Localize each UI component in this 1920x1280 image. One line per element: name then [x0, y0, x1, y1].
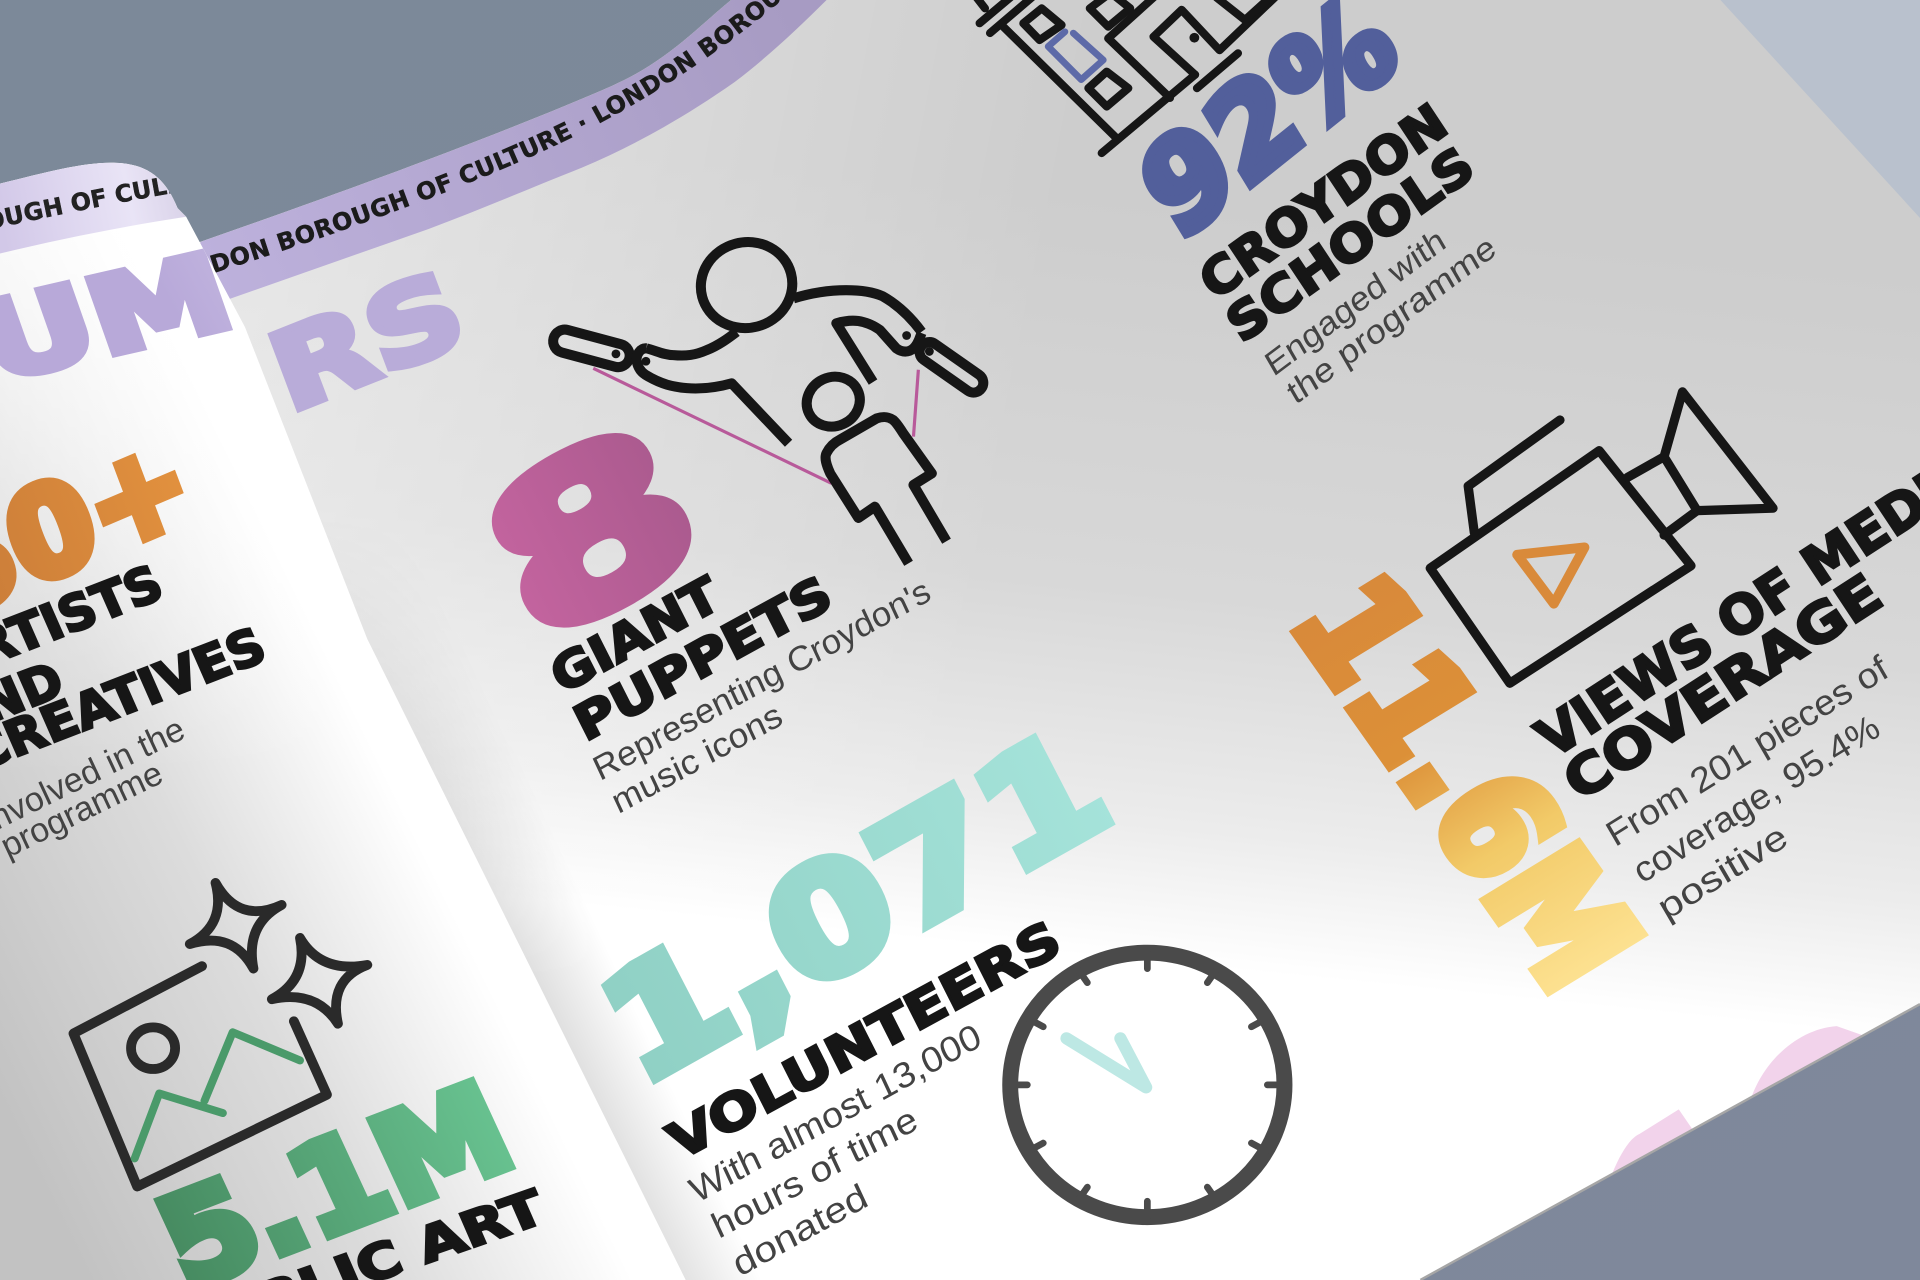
stat: croydon schools	[977, 0, 1502, 411]
page edge	[1420, 1004, 1920, 1280]
light page beneath, top right	[1690, 0, 1920, 245]
header band, left page	[0, 163, 186, 254]
big number: 11.6M: 11.6M	[1258, 549, 1672, 1018]
label: views of media coverage: COVERAGE	[1552, 562, 1893, 813]
label: giant puppets: GIANT	[542, 566, 729, 705]
text: coverage description: positive	[1651, 816, 1794, 928]
text: volunteers description	[684, 1017, 987, 1280]
icon: school building	[977, 0, 1275, 153]
label: volunteers: VOLUNTEERS	[658, 909, 1070, 1172]
panel: left page	[0, 162, 686, 1280]
text: volunteers description: hours of time	[706, 1100, 924, 1246]
stat: volunteers	[576, 695, 1284, 1280]
text: puppets description: Representing Croydon's	[587, 572, 936, 788]
label: artists and creatives	[0, 564, 264, 766]
label: giant puppets: PUPPETS	[565, 565, 841, 753]
stat: public art	[73, 883, 554, 1280]
text: volunteers description: With almost 13,000	[684, 1017, 987, 1211]
label: croydon schools: CROYDON	[1189, 92, 1457, 311]
icon: clock	[1010, 953, 1284, 1217]
text: coverage description: coverage, 95.4%	[1626, 707, 1886, 891]
icon: video camera	[1430, 392, 1773, 683]
big number: 8: 8	[450, 377, 736, 691]
text: artists description: programme	[0, 754, 169, 866]
text: schools description: the programme	[1280, 227, 1502, 411]
pink shapes at page bottom	[1611, 1026, 1861, 1176]
text: schools description: Engaged with	[1258, 221, 1451, 383]
stat: giant puppets	[450, 232, 987, 822]
heading: numbers, right half: RS	[254, 248, 480, 437]
icon: puppeteer and puppet	[551, 232, 987, 563]
text: puppets description: music icons	[606, 696, 788, 822]
icon: picture with sparkles	[73, 883, 367, 1187]
text: coverage description	[1599, 648, 1895, 928]
header band: London Borough of Culture	[200, 0, 826, 299]
text: coverage description: From 201 pieces of	[1599, 648, 1895, 854]
label: croydon schools: SCHOOLS	[1216, 135, 1484, 354]
stat: artists and creatives	[0, 452, 264, 864]
stat: views of media coverage	[1258, 392, 1920, 1018]
big number: 1,071: 1,071	[576, 695, 1133, 1117]
